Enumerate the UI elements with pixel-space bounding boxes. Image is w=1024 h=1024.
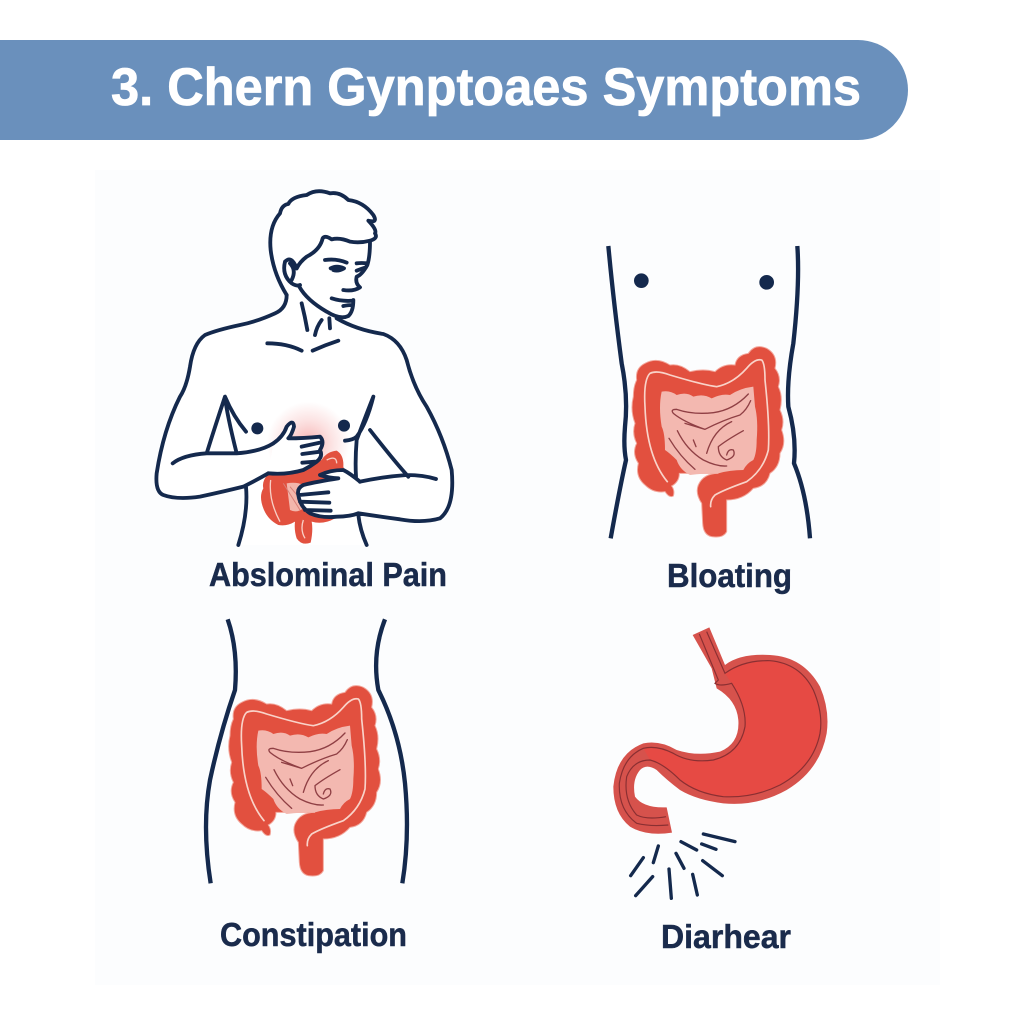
intestine under hands	[261, 451, 344, 544]
chest dots	[634, 273, 774, 290]
icon: stomach with diarrhea dashes	[613, 627, 827, 898]
torso outline	[608, 246, 810, 538]
title text: 3. Chern Gynptoaes Symptoms	[111, 58, 861, 117]
nipples	[251, 420, 350, 434]
torso outline	[206, 619, 407, 883]
title banner	[0, 40, 908, 140]
stomach	[613, 627, 827, 834]
panel: symptoms background	[95, 170, 940, 985]
label: constipation: Constipation	[220, 916, 407, 953]
outline: torso and arms	[156, 295, 452, 545]
hand: upper	[268, 422, 322, 474]
outline: ear	[284, 259, 300, 286]
icon: constipation torso	[206, 619, 407, 883]
label: diarrhea: Diarhear	[661, 918, 791, 955]
label: bloating: Bloating	[667, 557, 792, 594]
outline: hands and fingers	[268, 422, 360, 517]
icon: man holding abdomen	[156, 191, 452, 545]
outline: face	[299, 242, 370, 317]
abdominal pain glow	[267, 402, 350, 485]
outline: head and hair	[270, 191, 376, 295]
icon: bloating torso	[608, 246, 810, 538]
hand: lower	[298, 470, 367, 517]
label: abdominal pain: Abslominal Pain	[209, 556, 447, 593]
large intestine	[632, 347, 784, 537]
dashes	[631, 834, 735, 898]
large intestine	[229, 686, 380, 876]
